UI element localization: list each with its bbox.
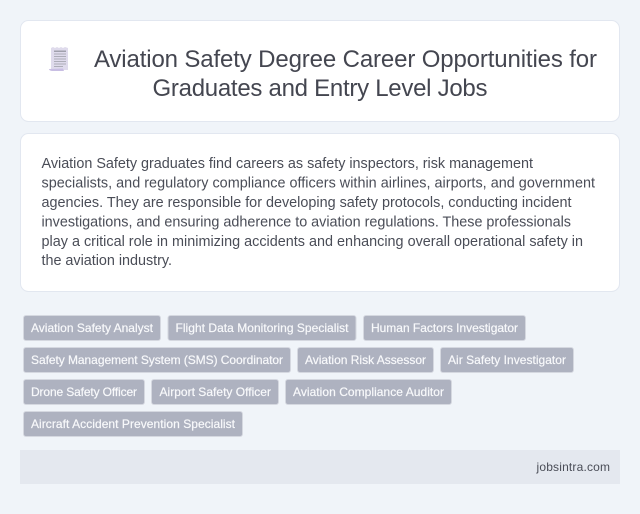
tag: Drone Safety Officer — [31, 385, 137, 399]
tag: Safety Management System (SMS) Coordinator — [31, 353, 283, 367]
text block: description: play a critical role in minimizing accidents and enhancing overall operational safety in — [42, 234, 583, 250]
tag: Aircraft Accident Prevention Specialist — [31, 417, 236, 431]
text block: description: the aviation industry. — [42, 253, 172, 269]
tag — [24, 412, 242, 436]
footer bar — [20, 450, 620, 484]
tag: Airport Safety Officer — [160, 385, 271, 399]
tag — [286, 380, 452, 404]
tag: Air Safety Investigator — [448, 353, 566, 367]
title — [94, 46, 597, 102]
title: Graduates and Entry Level Jobs — [152, 75, 488, 102]
title: Aviation Safety Degree Career Opportunities for — [94, 46, 597, 73]
panel: header card — [20, 20, 620, 122]
tag: Flight Data Monitoring Specialist — [176, 321, 349, 335]
tag: Aviation Safety Analyst — [31, 321, 154, 335]
tag: Aviation Risk Assessor — [305, 353, 426, 367]
text block: description: agencies. They are responsible for developing safety protocols, conducting incident — [42, 195, 572, 211]
footer text: source: jobsintra.com — [536, 460, 610, 474]
tag — [168, 316, 356, 340]
tag — [298, 348, 434, 372]
tags: job titles — [24, 316, 574, 436]
tag — [24, 316, 160, 340]
tag: Aviation Compliance Auditor — [293, 385, 444, 399]
tag — [152, 380, 278, 404]
icon: document — [49, 47, 68, 71]
tag — [364, 316, 526, 340]
tag — [24, 380, 144, 404]
text block: description: Aviation Safety graduates find careers as safety inspectors, risk management — [42, 156, 533, 172]
tag: Human Factors Investigator — [371, 321, 518, 335]
tag — [440, 348, 574, 372]
text block: description — [42, 156, 595, 269]
panel: description card — [20, 134, 620, 292]
text block: description: investigations, and ensuring adherence to aviation regulations. These professionals — [42, 214, 571, 230]
tag — [24, 348, 290, 372]
text block: description: specialists, and regulatory compliance officers within airlines, airports, and government — [42, 176, 595, 192]
